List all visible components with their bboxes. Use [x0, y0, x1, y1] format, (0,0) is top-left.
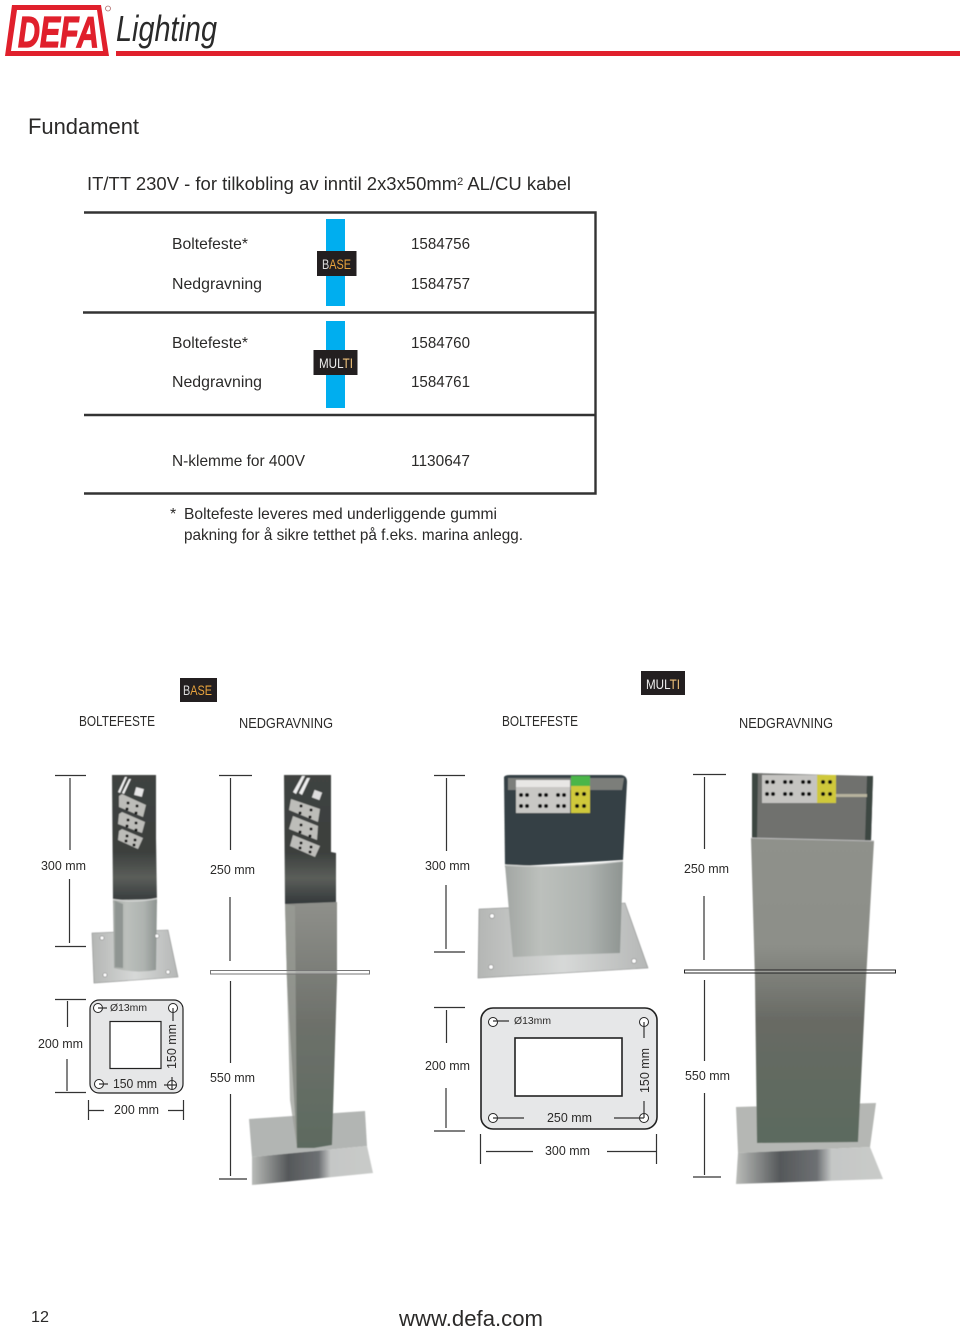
badge: MULTI with blue bar — [314, 321, 358, 408]
panel: product table — [83, 212, 596, 494]
heading: Fundament: Fundament — [28, 114, 139, 139]
MULTI row 2 name: Nedgravning — [172, 374, 262, 391]
dimension: 250 mm base: 250 mm — [210, 863, 255, 877]
header red rule — [116, 51, 960, 56]
logo wordmark: Lighting: Lighting — [116, 8, 217, 49]
dimension: 550 mm multi — [685, 980, 730, 1177]
footnote — [170, 506, 523, 544]
MULTI row 1 name: Boltefeste* — [172, 335, 248, 352]
dimension: 300 mm multi — [425, 776, 470, 952]
dimension: 300 mm base — [41, 776, 86, 946]
dimension: 300 mm width multi plate — [480, 1134, 656, 1164]
column label: BOLTEFESTE base: BOLTEFESTE — [79, 714, 155, 730]
dimension: 200 mm width base plate: 200 mm — [114, 1103, 159, 1117]
dimension: 200 mm height base plate — [38, 1000, 86, 1092]
column label: NEDGRAVNING multi: NEDGRAVNING — [739, 716, 833, 732]
dimension: 550 mm base — [210, 981, 255, 1179]
MULTI article no 2: 1584761 — [411, 374, 470, 391]
label: hole spacing horizontal: 150 mm — [113, 1077, 157, 1091]
photo: multi bolted post — [478, 775, 648, 978]
dimension: 550 mm multi: 550 mm — [685, 1069, 730, 1083]
dimension: 250 mm multi — [684, 774, 729, 960]
MULTI article no 1: 1584760 — [411, 335, 470, 352]
dimension: 250 mm multi: 250 mm — [684, 862, 729, 876]
dimension: 200 mm width base plate — [88, 1100, 184, 1120]
badge: BASE: BASE — [183, 683, 212, 698]
logo: DEFA: DEFA — [18, 8, 99, 57]
label: hole spacing vertical: 150 mm — [638, 1048, 652, 1093]
footnote: pakning for å sikre tetthet på f.eks. marina anlegg. — [184, 526, 523, 544]
BASE article no 2: 1584757 — [411, 276, 470, 293]
column label: BOLTEFESTE multi: BOLTEFESTE — [502, 714, 578, 730]
dimension: 200 mm height base plate: 200 mm — [38, 1037, 83, 1051]
label: hole diameter: Ø13mm — [514, 1016, 551, 1027]
diagram: multi plate — [481, 1008, 657, 1129]
label: hole spacing horizontal: 250 mm — [547, 1111, 592, 1125]
badge: BASE with blue bar — [317, 219, 356, 306]
BASE row 1 name: Boltefeste* — [172, 236, 248, 253]
ground line: base — [210, 970, 370, 974]
badge: BASE with blue bar: BASE — [322, 257, 351, 272]
dimension: 200 mm height multi plate — [425, 1008, 470, 1131]
photo: multi buried post — [736, 773, 883, 1184]
subheading: 2 — [457, 176, 463, 188]
N-klemme article no: 1130647 — [411, 453, 470, 470]
label: hole spacing vertical: 150 mm — [165, 1024, 179, 1069]
badge: MULTI: MULTI — [646, 677, 680, 692]
logo: DEFA — [5, 5, 110, 57]
badge: MULTI — [641, 671, 685, 695]
BASE article no 1: 1584756 — [411, 236, 470, 253]
photo: base bolted post — [92, 775, 178, 983]
BASE row 2 name: Nedgravning — [172, 276, 262, 293]
dimension: 300 mm multi: 300 mm — [425, 859, 470, 873]
dimension: 550 mm base: 550 mm — [210, 1071, 255, 1085]
footnote: * — [170, 506, 176, 523]
subheading: AL/CU kabel — [463, 173, 571, 194]
subheading: IT/TT 230V - for tilkobling av inntil 2x3x50mm — [87, 173, 458, 194]
column label: NEDGRAVNING base: NEDGRAVNING — [239, 716, 333, 732]
N-klemme name: N-klemme for 400V — [172, 453, 305, 470]
dimension: 250 mm base — [210, 776, 255, 961]
dimension: 300 mm base: 300 mm — [41, 859, 86, 873]
footnote: Boltefeste leveres med underliggende gummi — [184, 506, 497, 523]
dimension: 200 mm height multi plate: 200 mm — [425, 1059, 470, 1073]
page number: 12 — [31, 1309, 49, 1326]
photo: base buried post — [249, 775, 373, 1185]
ground line: multi — [684, 970, 896, 973]
dimension: 300 mm width multi plate: 300 mm — [545, 1144, 590, 1158]
badge: BASE — [180, 678, 217, 702]
label: hole diameter: Ø13mm — [110, 1003, 147, 1014]
diagram: base plate — [90, 1000, 183, 1093]
badge: MULTI with blue bar: MULTI — [319, 356, 353, 371]
